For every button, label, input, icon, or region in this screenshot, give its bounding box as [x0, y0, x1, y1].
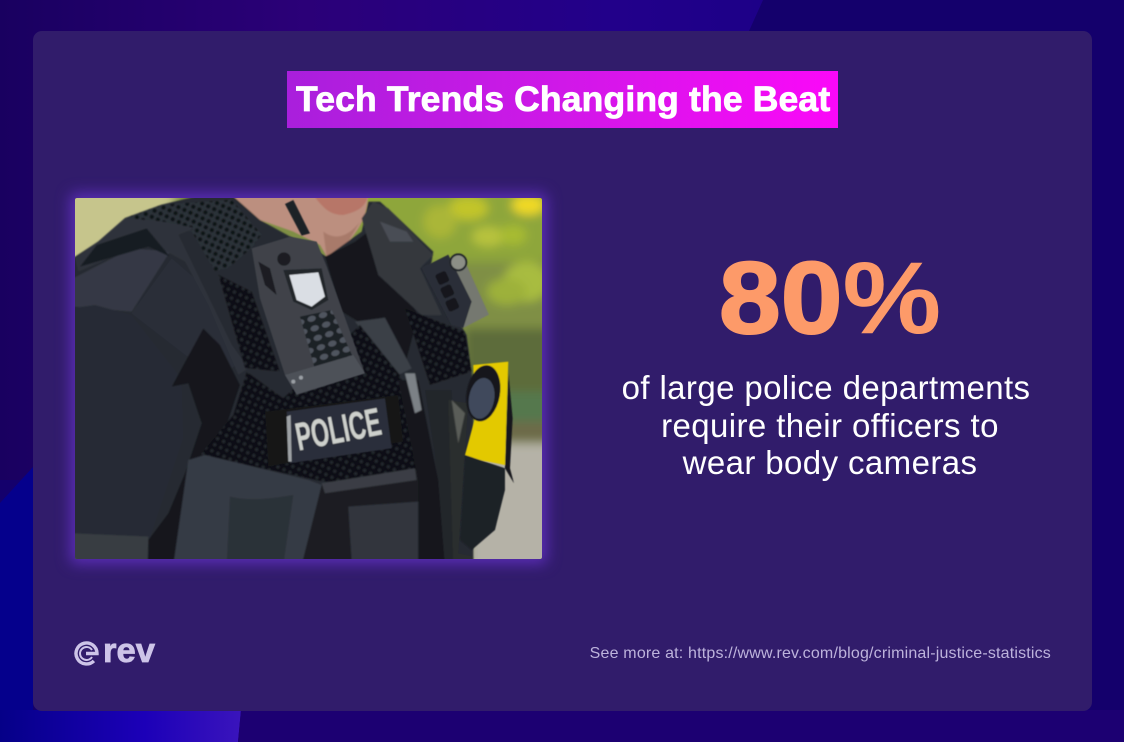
mesh vest centre: [200, 325, 433, 485]
yellow device: [460, 362, 514, 550]
text block: statistic description: wear body cameras: [683, 444, 977, 481]
title: [287, 71, 838, 128]
lower strap mesh: [218, 275, 280, 372]
text block: statistic description: [622, 369, 1030, 481]
police patch: POLICE: [292, 400, 385, 459]
neck dark fabric: [325, 232, 418, 365]
lower pouches: [173, 455, 322, 565]
text block: statistic description: of large police departments: [622, 369, 1030, 406]
source link text: See more at: https://www.rev.com/blog/criminal-justice-statistics: [590, 645, 1051, 662]
photo: police officer vest with radio and body camera: [75, 198, 542, 559]
logo: rev: [74, 639, 156, 667]
background foliage: [60, 185, 572, 578]
skin: [232, 195, 368, 257]
title: Tech Trends Changing the Beat: [296, 79, 830, 119]
holster back: [448, 400, 473, 565]
body camera: [422, 254, 489, 328]
text block: statistic description: require their officers to: [661, 406, 999, 444]
police patch: [265, 395, 403, 467]
zipper: [398, 380, 445, 565]
police radio: [252, 200, 365, 395]
statistic: 80%: 80%: [719, 241, 941, 355]
jacket base: [70, 195, 473, 565]
dark fold: [148, 328, 240, 565]
shoulder strap band: [75, 218, 248, 375]
shoulder mesh: [125, 200, 262, 271]
right collar strap: [362, 202, 442, 315]
lit sleeve and shoulder: [70, 248, 170, 312]
